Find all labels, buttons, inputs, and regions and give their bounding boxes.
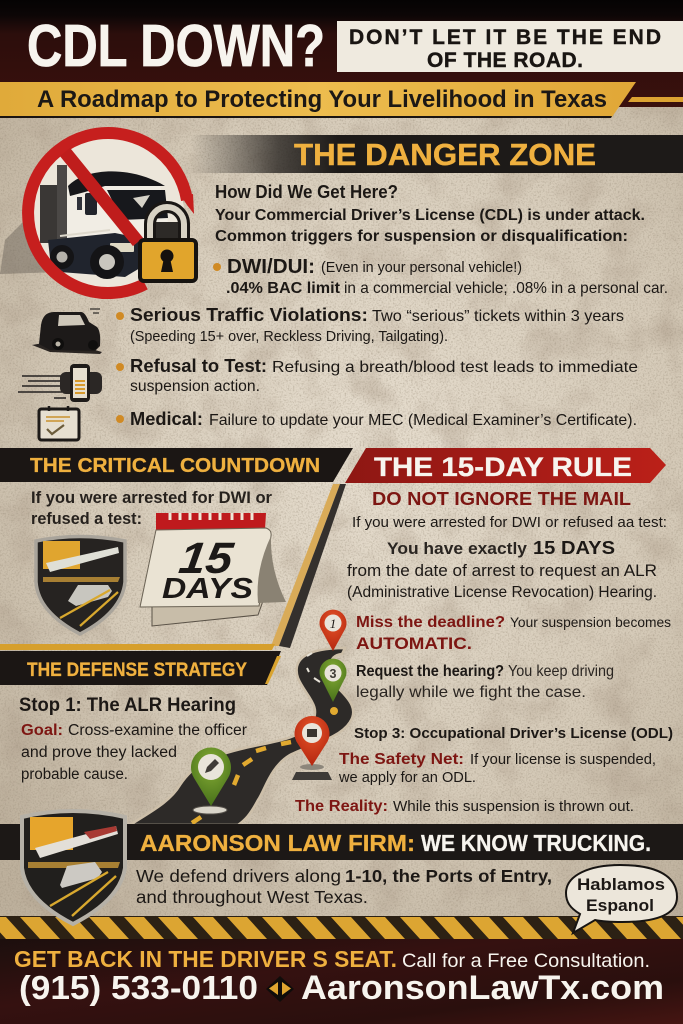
header band <box>0 0 683 107</box>
text block: how did we get here: Common triggers for suspension or disqualification: <box>215 228 628 245</box>
step 3: occupational license: If your license is suspended, <box>470 752 656 768</box>
bullet: serious traffic violations: Two “serious” tickets within 3 years <box>372 308 624 325</box>
roadmap steps <box>295 614 673 815</box>
icon: shield with truck and road <box>36 536 125 634</box>
firm logo shield <box>22 811 125 924</box>
step: request the hearing: legally while we fight the case. <box>356 684 586 701</box>
pin: number 3: 3 <box>330 667 337 681</box>
text: get back in the driver's seat: Call for a Free Consultation. <box>402 950 650 972</box>
bullet: serious traffic violations <box>116 304 624 345</box>
step 3: occupational license: The Safety Net: <box>339 751 464 768</box>
text: arrested for dwi: If you were arrested for DWI or <box>31 489 273 507</box>
text: exact deadline: (Administrative License Revocation) Hearing. <box>347 584 657 601</box>
step: request the hearing: You keep driving <box>508 663 614 680</box>
heading: the danger zone <box>190 135 683 173</box>
heading: the defense strategy <box>0 651 281 685</box>
panel: the critical countdown <box>0 448 353 634</box>
subtitle ribbon <box>0 82 683 118</box>
text: where we defend: and throughout West Texas. <box>136 887 368 907</box>
step 3: occupational license <box>338 725 673 786</box>
bullet: serious traffic violations: (Speeding 15+ over, Reckless Driving, Tailgating). <box>130 328 448 345</box>
icon: clipboard <box>39 406 79 440</box>
text: the reality: While this suspension is thrown out. <box>393 798 634 815</box>
text: stop 1: probable cause. <box>21 766 128 783</box>
heading band <box>0 824 683 860</box>
footer call to action <box>14 946 664 1007</box>
bullet: refusal to test: Refusing a breath/blood test leads to immediate <box>272 359 638 376</box>
text: stop 1: and prove they lacked <box>21 744 177 761</box>
step: miss the deadline: AUTOMATIC. <box>356 635 472 653</box>
icon: truck with prohibition sign and padlock <box>0 133 196 293</box>
text: stop 1: Cross-examine the officer <box>68 722 247 739</box>
text: the reality: The Reality: <box>295 798 388 815</box>
text: exact deadline: If you were arrested for DWI or refused aa test: <box>352 515 667 531</box>
heading: the defense strategy: THE DEFENSE STRATEGY <box>27 660 247 681</box>
heading: the critical countdown <box>0 448 353 482</box>
bullet: dwi/dui <box>213 256 668 297</box>
step 3: occupational license: Stop 3: Occupational Driver’s License (ODL) <box>354 725 673 742</box>
text: where we defend <box>136 866 552 907</box>
banner: the 15-day rule: THE 15-DAY RULE <box>374 452 632 482</box>
text: arrested for dwi <box>31 489 273 528</box>
road illustration <box>130 610 353 825</box>
text: get back in the driver's seat <box>14 946 650 972</box>
speech bubble: hablamos espanol <box>566 865 677 933</box>
step: request the hearing <box>356 663 614 701</box>
text: phone number: (915) 533-0110 <box>19 970 258 1007</box>
step: request the hearing: Request the hearing? <box>356 663 504 680</box>
icon: 15 days calendar: DAYS <box>162 573 254 605</box>
text: arrested for dwi: refused a test: <box>31 510 142 528</box>
subtitle ribbon: A Roadmap to Protecting Your Livelihood in Texas <box>37 86 607 113</box>
bullet: dwi/dui: DWI/DUI: <box>227 256 315 278</box>
text: exact deadline: You have exactly <box>387 539 528 558</box>
heading band: AARONSON LAW FIRM: <box>140 830 415 856</box>
bullet: refusal to test: Refusal to Test: <box>130 355 267 376</box>
heading: the danger zone: THE DANGER ZONE <box>294 138 596 172</box>
text: where we defend: 1-10, the Ports of Entry, <box>345 866 552 886</box>
text: exact deadline: 15 DAYS <box>533 538 615 558</box>
panel: the danger zone <box>0 133 683 440</box>
title: CDL DOWN? <box>27 13 325 79</box>
icon: diamond arrows <box>266 976 294 1002</box>
tagline box: OF THE ROAD. <box>427 49 583 72</box>
text block: how did we get here <box>215 182 645 245</box>
pin: number 1: 1 <box>330 616 336 631</box>
text: stop 1: Goal: <box>21 722 63 739</box>
bullet: dwi/dui: (Even in your personal vehicle!) <box>321 259 522 276</box>
text: exact deadline: from the date of arrest to request an ALR <box>347 562 657 580</box>
step: miss the deadline: Your suspension becomes <box>510 614 671 630</box>
panel: the defense strategy <box>0 610 353 825</box>
icon: 15 days calendar <box>140 513 286 626</box>
tagline box: DON’T LET IT BE THE END <box>349 26 661 49</box>
bullet: medical: Failure to update your MEC (Medical Examiner’s Certificate). <box>209 412 637 429</box>
text: get back in the driver's seat: GET BACK IN THE DRIVER S SEAT. <box>14 946 397 972</box>
step: miss the deadline: Miss the deadline? <box>356 614 505 631</box>
step 3: occupational license: we apply for an ODL. <box>338 770 476 786</box>
bullet: medical <box>116 408 637 429</box>
heading: the critical countdown: THE CRITICAL COUNTDOWN <box>30 455 320 477</box>
heading band: WE KNOW TRUCKING. <box>421 830 651 856</box>
text: exact deadline <box>347 515 667 601</box>
text: where we defend: We defend drivers along <box>136 866 341 886</box>
heading: do not ignore the mail: DO NOT IGNORE THE MAIL <box>372 489 631 509</box>
speech bubble: hablamos espanol: Espanol <box>586 896 654 915</box>
pin 3: orange safety <box>292 716 332 780</box>
diagonal divider stripe <box>0 484 346 650</box>
speech bubble: hablamos espanol: Hablamos <box>577 875 665 894</box>
icon: 15 days calendar: 15 <box>176 534 237 583</box>
bullet: serious traffic violations: Serious Traffic Violations: <box>130 304 368 325</box>
text: website: AaronsonLawTx.com <box>301 969 664 1007</box>
bullet: dwi/dui: in a commercial vehicle; .08% in a personal car. <box>344 280 668 297</box>
text block: how did we get here: Your Commercial Driver’s License (CDL) is under attack. <box>215 207 645 224</box>
pin: number 3 <box>320 659 347 702</box>
icon: breath test device <box>18 364 102 402</box>
pin: number 1 <box>320 610 347 651</box>
tagline box <box>337 21 683 72</box>
bullet: refusal to test <box>116 355 638 395</box>
panel: the 15-day rule <box>345 448 667 601</box>
step: miss the deadline <box>356 614 671 653</box>
text: stop 1: Stop 1: The ALR Hearing <box>19 695 236 716</box>
icon: car <box>32 309 102 354</box>
bullet: dwi/dui: .04% BAC limit <box>226 280 341 297</box>
banner: the 15-day rule <box>345 448 666 483</box>
pin 4: green pencil <box>191 747 231 814</box>
bullet: refusal to test: suspension action. <box>130 378 260 395</box>
panel: hazard stripe and footer background <box>0 916 683 1024</box>
panel: aaronson law firm <box>0 811 683 933</box>
text block: how did we get here: How Did We Get Here? <box>215 182 398 202</box>
text: stop 1 <box>19 695 247 783</box>
bullet: medical: Medical: <box>130 408 203 429</box>
